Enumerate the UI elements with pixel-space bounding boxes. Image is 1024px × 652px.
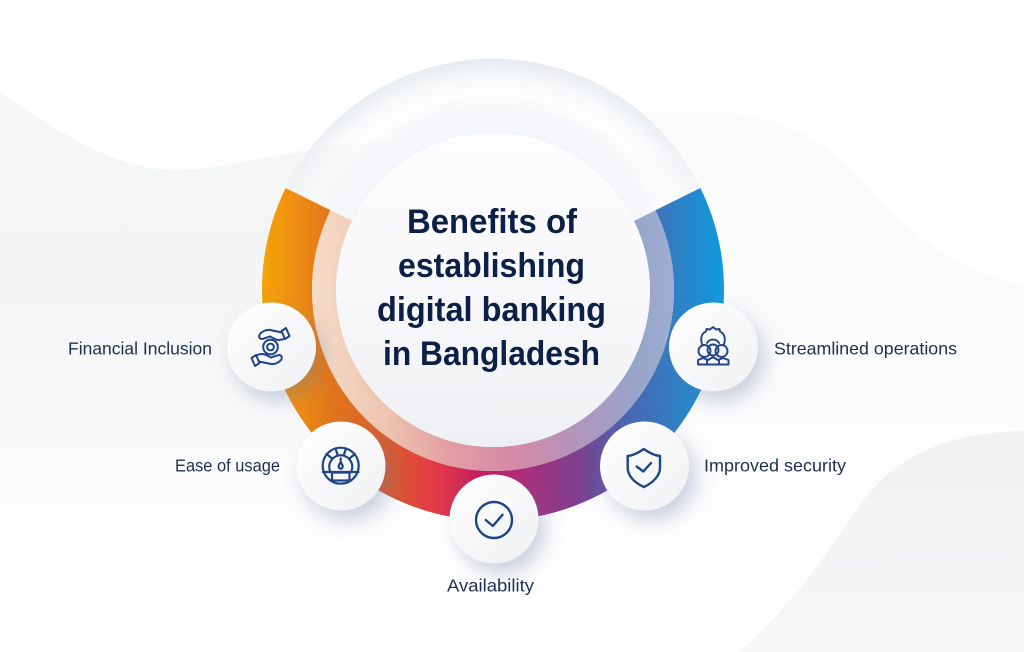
title: establishing (398, 247, 585, 285)
icon: team and gear (698, 327, 728, 364)
item: Availability (447, 474, 538, 596)
label: Financial Inclusion (68, 338, 212, 358)
item: Improved security (600, 422, 846, 510)
icon: speed gauge (323, 448, 359, 484)
icon: hands and coin (252, 328, 290, 366)
title: digital banking (377, 291, 606, 329)
item: Ease of usage (175, 422, 386, 510)
label: Availability (447, 576, 534, 596)
title: Benefits of (407, 203, 578, 241)
icon: check circle (476, 502, 512, 538)
label: Improved security (704, 456, 846, 476)
item: Financial Inclusion (68, 302, 316, 392)
label: Streamlined operations (774, 338, 957, 358)
centre circle (336, 133, 650, 447)
icon: shield with check (628, 449, 660, 487)
title (377, 203, 606, 373)
ghost upper ring (301, 58, 698, 185)
label: Ease of usage (175, 456, 280, 476)
title: in Bangladesh (383, 335, 600, 373)
gradient ring (262, 188, 724, 521)
translucent inner ring (312, 109, 674, 471)
item: Streamlined operations (669, 302, 957, 392)
